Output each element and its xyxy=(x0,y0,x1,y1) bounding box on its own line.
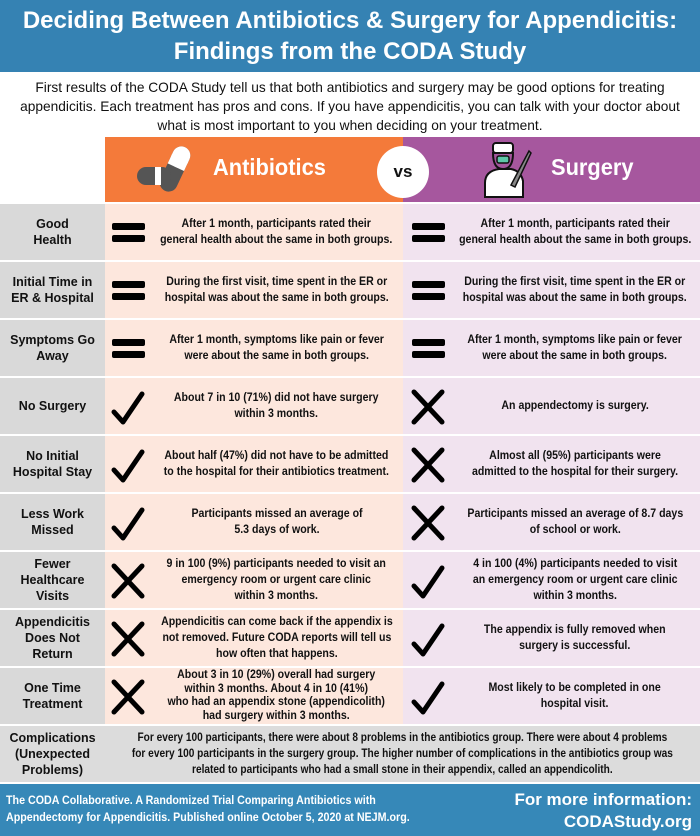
row: Symptoms: Symptoms Go xyxy=(10,333,95,347)
heading: Antibiotics: Antibiotics xyxy=(213,154,326,180)
row: Good Health: general health about the same in both groups. xyxy=(459,234,691,246)
row: Fewer Healthcare Visits: Fewer xyxy=(34,557,71,571)
more info: For more information: xyxy=(514,790,692,809)
row: Fewer Healthcare Visits: within 3 months. xyxy=(235,590,318,602)
row: Appendicitis Does Not Return: Appendicitis xyxy=(15,615,90,629)
row: Symptoms: After 1 month, symptoms like pain or fever xyxy=(169,334,384,346)
row: Fewer Healthcare Visits xyxy=(0,552,700,608)
row: Initial Time xyxy=(0,262,700,318)
row: Appendicitis Does Not Return: not removed. Future CODA reports will tell us xyxy=(162,632,391,644)
intro text: First results of the CODA Study tell us that both antibiotics and surgery may be good options for treating xyxy=(35,79,665,95)
row: Good Health: general health about the same in both groups. xyxy=(160,234,393,246)
row: No Surgery: within 3 months. xyxy=(235,408,318,420)
row: One Time Treatment: Treatment xyxy=(23,697,82,711)
row: Initial Time: During the first visit, time spent in the ER or xyxy=(464,276,686,288)
row: Appendicitis Does Not Return: Does Not xyxy=(25,631,80,645)
row: Less Work Missed: Participants missed an average of xyxy=(191,508,362,520)
icon: surgeon xyxy=(484,142,532,198)
row: Less Work Missed: of school or work. xyxy=(529,524,621,536)
row: Symptoms: were about the same in both groups. xyxy=(483,350,667,362)
row: One Time Treatment: About 3 in 10 (29%) overall had surgery xyxy=(177,669,376,681)
more info xyxy=(514,790,692,831)
row: Less Work Missed: Participants missed an average of 8.7 days xyxy=(467,508,683,520)
row: Initial Time: Initial Time in xyxy=(13,275,92,289)
row: One Time Treatment: had surgery within 3 months. xyxy=(203,710,350,722)
row: No Surgery: About 7 in 10 (71%) did not have surgery xyxy=(174,392,379,404)
row: One Time Treatment: Most likely to be completed in one xyxy=(489,682,661,694)
row: No Surgery: No Surgery xyxy=(19,399,86,413)
row: Complications: For every 100 participants, there were about 8 problems in the antibiotics group. There were about 4 problems xyxy=(138,732,667,744)
title: Deciding Between Antibiotics & Surgery for Appendicitis: xyxy=(23,7,677,34)
row: Less Work Missed: Missed xyxy=(31,523,74,537)
row: Fewer Healthcare Visits: 9 in 100 (9%) participants needed to visit an xyxy=(167,558,386,570)
row: Appendicitis Does Not Return: The appendix is fully removed when xyxy=(484,624,666,636)
row: No Surgery: An appendectomy is surgery. xyxy=(501,400,649,412)
header: antibiotics xyxy=(105,137,403,202)
row: Initial Time: ER & Hospital xyxy=(11,291,94,305)
row: Appendicitis Does Not Return: Return xyxy=(32,647,73,661)
row: Fewer Healthcare Visits: an emergency room or urgent care clinic xyxy=(473,574,677,586)
row: Complications: for every 100 participants in the surgery group. The higher number of complications in the antibiotics group was xyxy=(132,748,673,760)
citation xyxy=(6,795,410,824)
row: Fewer Healthcare Visits: Visits xyxy=(36,589,69,603)
row: One Time Treatment: One Time xyxy=(24,681,81,695)
intro text xyxy=(20,79,680,133)
row: Initial Time: During the first visit, time spent in the ER or xyxy=(166,276,387,288)
row: Good Health: Good xyxy=(36,217,69,231)
vs circle: vs xyxy=(394,162,412,181)
row: Symptoms: were about the same in both groups. xyxy=(184,350,369,362)
row: Fewer Healthcare Visits: 4 in 100 (4%) participants needed to visit xyxy=(473,558,677,570)
row: No Surgery xyxy=(0,378,700,434)
row: Symptoms: Away xyxy=(36,349,69,363)
vs circle xyxy=(377,146,429,198)
row: Good Health xyxy=(0,204,700,260)
row: Symptoms: After 1 month, symptoms like pain or fever xyxy=(468,334,682,346)
citation: The CODA Collaborative. A Randomized Trial Comparing Antibiotics with xyxy=(6,795,376,807)
row: Less Work Missed: Less Work xyxy=(21,507,84,521)
row: One Time Treatment: who had an appendix stone (appendicolith) xyxy=(168,696,385,708)
row: No Initial Hospital Stay xyxy=(0,436,700,492)
intro text: appendicitis. Each treatment has pros and cons. If you have appendicitis, you can talk with your doctor about xyxy=(20,98,680,114)
row: Good Health: After 1 month, participants rated their xyxy=(182,218,371,230)
intro text: what is most important to you when deciding on your treatment. xyxy=(157,117,543,133)
row: Appendicitis Does Not Return xyxy=(0,610,700,666)
row: No Initial Hospital Stay: About half (47%) did not have to be admitted xyxy=(165,450,388,462)
header: surgery xyxy=(403,137,700,202)
citation: Appendectomy for Appendicitis. Published online October 5, 2020 at NEJM.org. xyxy=(6,812,410,824)
row: No Initial Hospital Stay: No Initial xyxy=(26,449,79,463)
footer xyxy=(0,784,700,836)
title: Findings from the CODA Study xyxy=(174,38,526,65)
more info: CODAStudy.org xyxy=(564,812,692,831)
row: Less Work Missed: 5.3 days of work. xyxy=(234,524,319,536)
row: No Initial Hospital Stay: admitted to the hospital for their surgery. xyxy=(472,466,678,478)
row: Initial Time: hospital was about the same in both groups. xyxy=(463,292,687,304)
row: Symptoms xyxy=(0,320,700,376)
row: Complications xyxy=(0,726,700,782)
row: Fewer Healthcare Visits: emergency room or urgent care clinic xyxy=(182,574,371,586)
row: Complications: Complications xyxy=(9,731,96,745)
row: Complications: Problems) xyxy=(22,763,83,777)
row: One Time Treatment xyxy=(0,668,700,724)
row: Fewer Healthcare Visits: Healthcare xyxy=(21,573,84,587)
row: Fewer Healthcare Visits: within 3 months. xyxy=(533,590,617,602)
row: No Initial Hospital Stay: to the hospital for their antibiotics treatment. xyxy=(164,466,389,478)
row: Complications: related to participants who had a small stone in their appendix, called an appendicolith. xyxy=(192,764,613,776)
row: One Time Treatment: hospital visit. xyxy=(541,698,609,710)
row: Appendicitis Does Not Return: surgery is successful. xyxy=(519,640,631,652)
row: No Initial Hospital Stay: Hospital Stay xyxy=(13,465,92,479)
row: Complications: (Unexpected xyxy=(15,747,90,761)
row: Less Work Missed xyxy=(0,494,700,550)
row: Appendicitis Does Not Return: Appendicitis can come back if the appendix is xyxy=(161,616,392,628)
row: Appendicitis Does Not Return: how often that happens. xyxy=(216,648,337,660)
row: One Time Treatment: within 3 months. About 4 in 10 (41%) xyxy=(185,682,368,694)
title xyxy=(0,0,700,72)
row: Initial Time: hospital was about the same in both groups. xyxy=(165,292,388,304)
row: Good Health: Health xyxy=(33,233,72,247)
icon: pill xyxy=(137,146,190,192)
heading: Surgery: Surgery xyxy=(551,154,634,180)
row: No Initial Hospital Stay: Almost all (95%) participants were xyxy=(489,450,661,462)
row: Good Health: After 1 month, participants rated their xyxy=(480,218,670,230)
